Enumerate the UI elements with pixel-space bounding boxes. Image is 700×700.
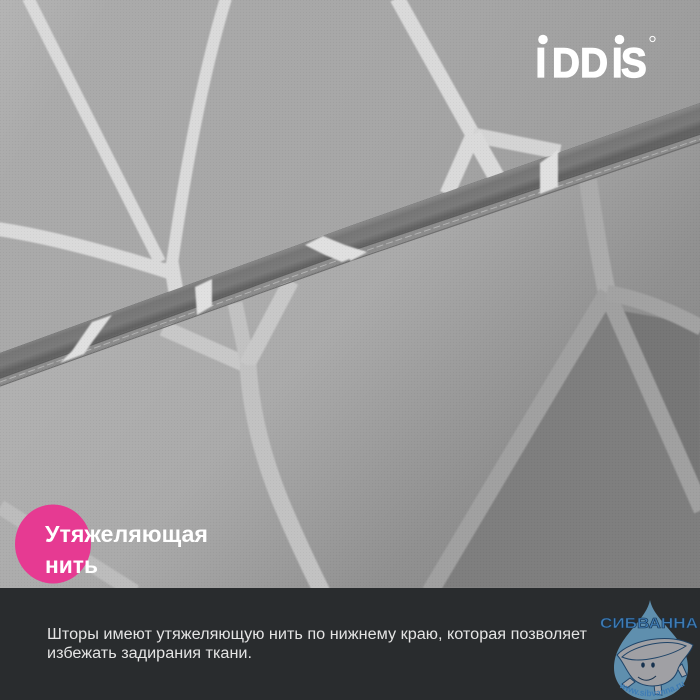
website url: www.sibvanna.ru (620, 682, 685, 696)
icon: water drop (614, 600, 688, 700)
icon: bathtub (617, 638, 693, 695)
fabric above the hem (0, 0, 700, 353)
pink circle accent (15, 504, 91, 584)
footer panel (0, 588, 700, 700)
weighted hem band (0, 103, 700, 386)
fabric below the hem (0, 137, 700, 592)
logo: IDDIS: IDDIS (536, 38, 647, 86)
heading: нить (45, 552, 98, 578)
description text (47, 626, 587, 662)
logo: Sibvanna watermark (600, 600, 698, 700)
description text: Шторы имеют утяжеляющую нить по нижнему краю, которая позволяет (47, 626, 587, 643)
icon: bathtub face (638, 662, 656, 680)
heading: Утяжеляющая (45, 521, 208, 547)
description text: избежать задирания ткани. (47, 645, 252, 662)
heading (45, 521, 208, 578)
brand name: СИБВАННА (600, 615, 698, 632)
